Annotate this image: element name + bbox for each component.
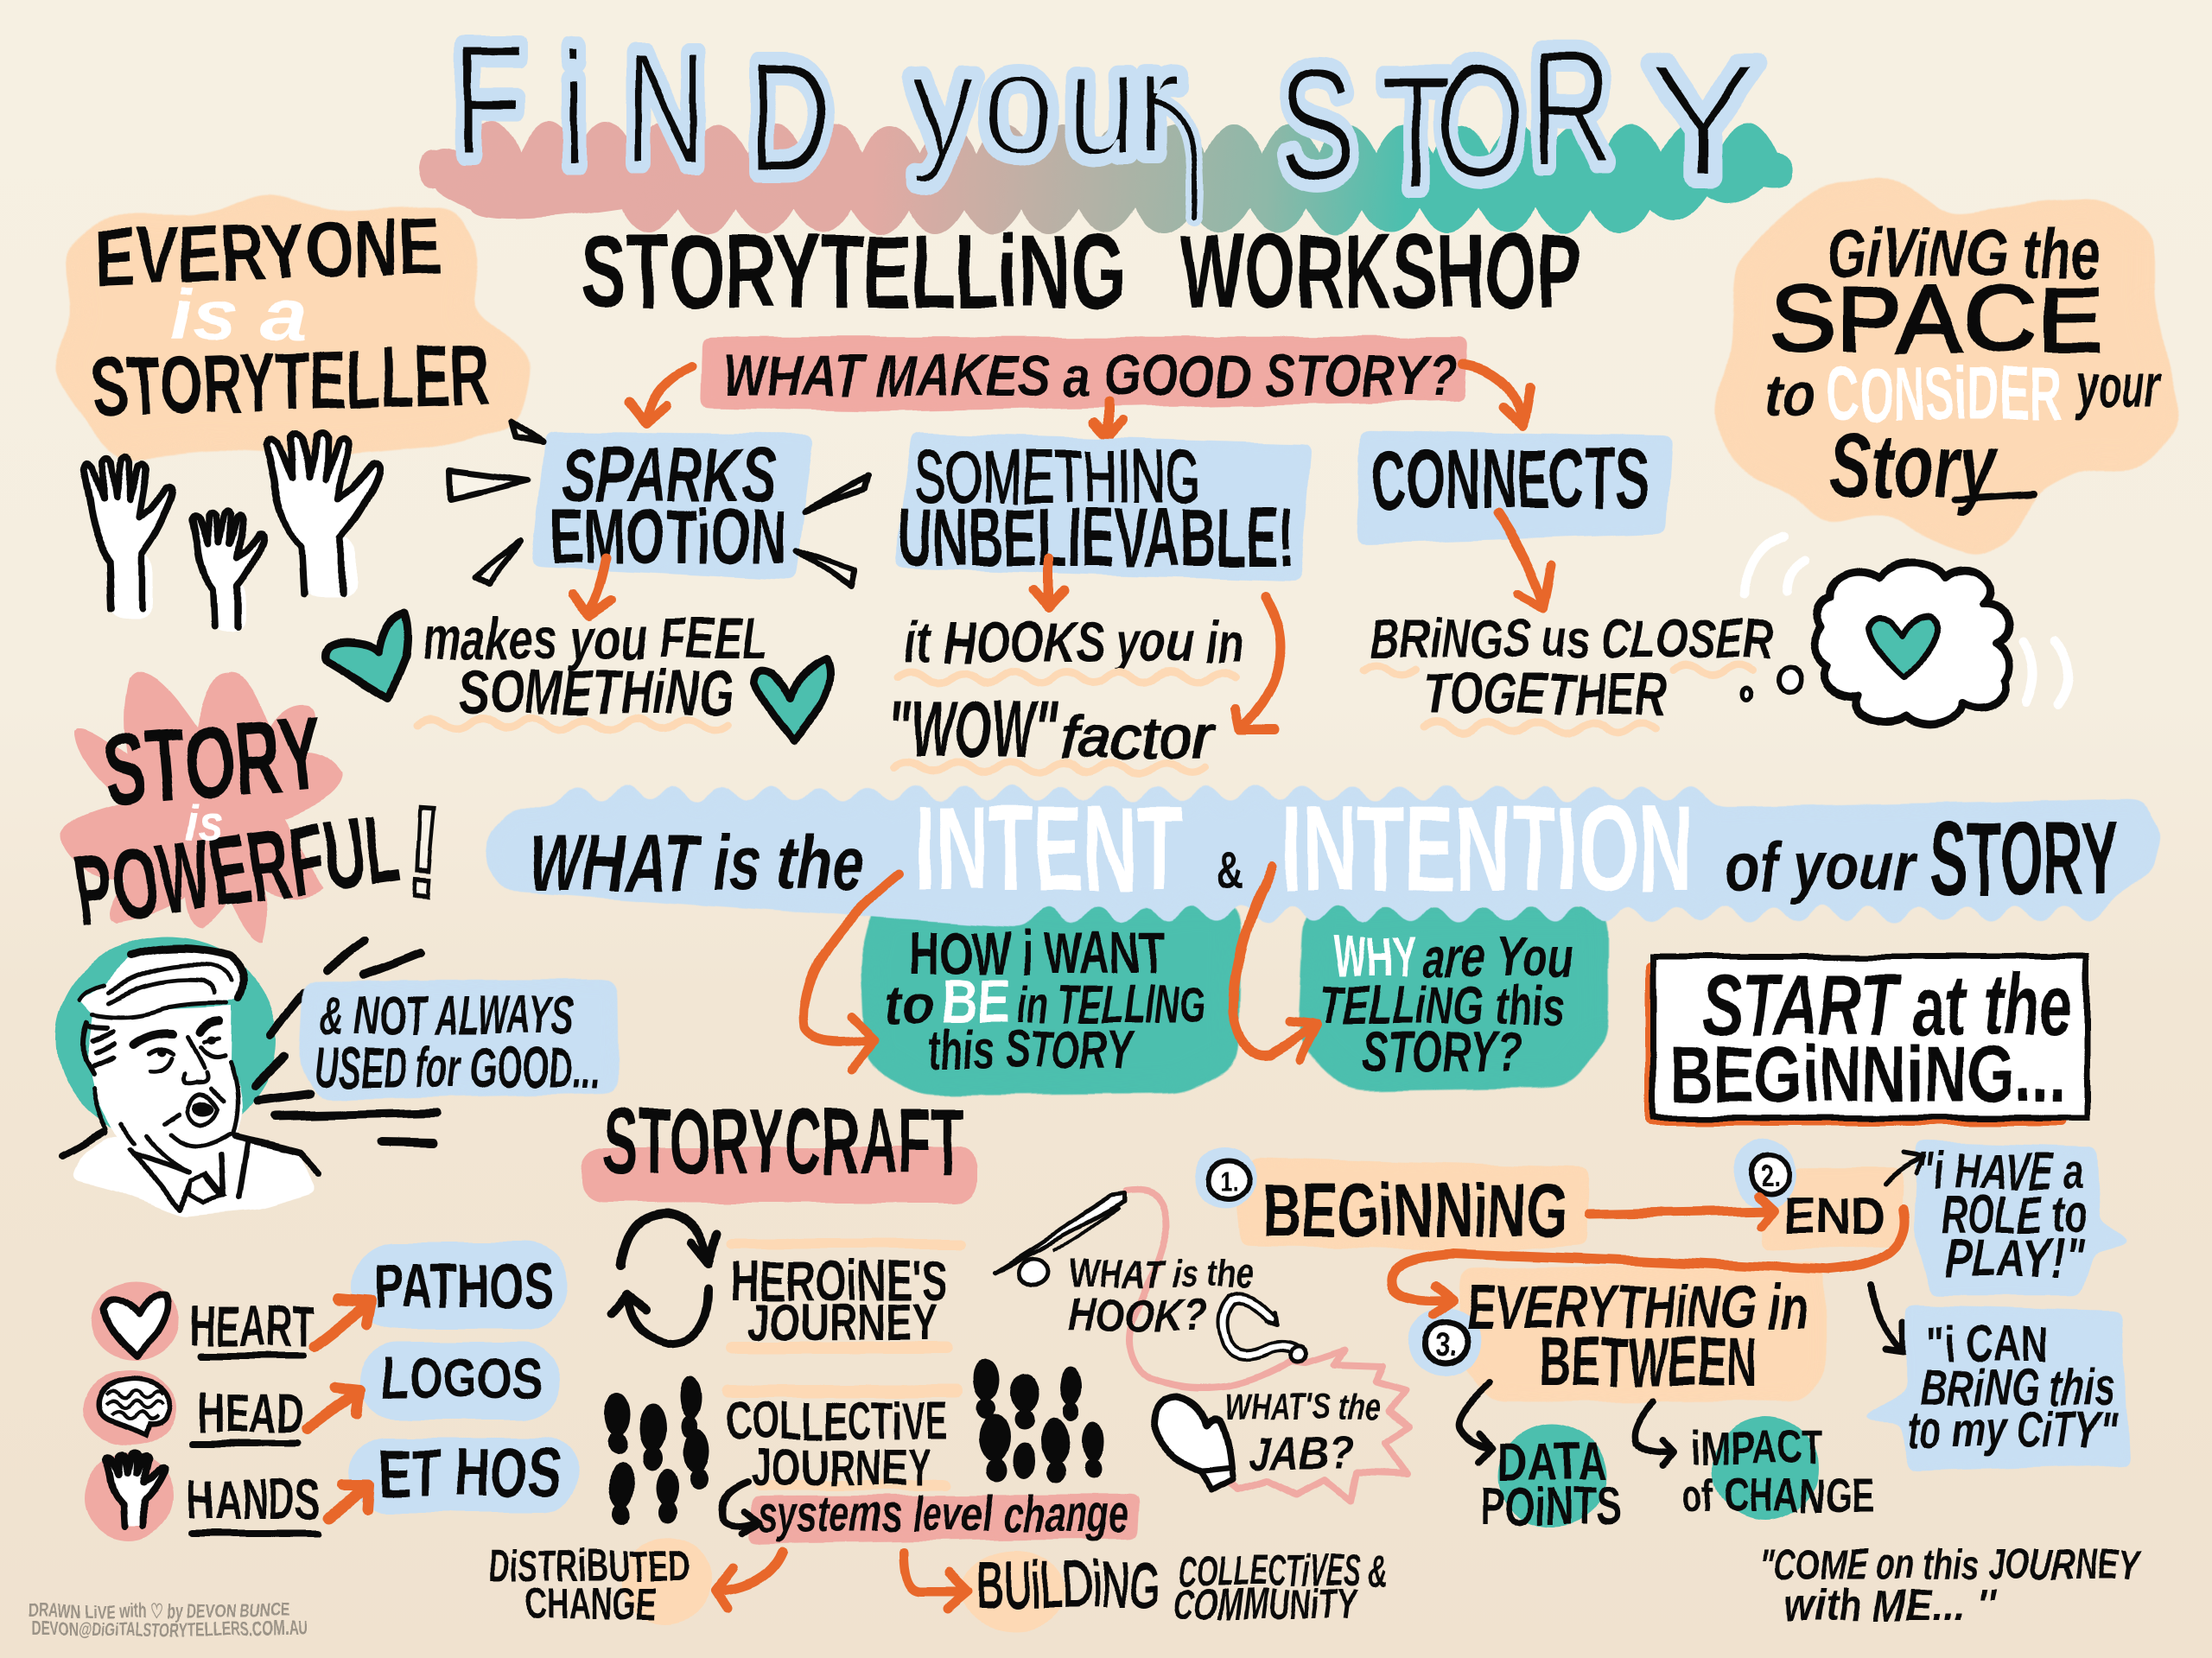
- banner shape: [486, 780, 2162, 928]
- banner text: of your: [1724, 829, 1918, 905]
- panel: story is powerful: is: [185, 795, 225, 851]
- side hair: [82, 1022, 114, 1074]
- distributed change: CHANGE: [525, 1579, 656, 1628]
- quote bubble: I have a role to play: ROLE to: [1942, 1185, 2087, 1245]
- pink hook line and jab outline: [1128, 1191, 1410, 1501]
- callout: and not always used for good: USED for GOOD...: [314, 1035, 600, 1099]
- text: why are you telling this story: are You: [1422, 926, 1573, 988]
- data points: POiNTS: [1480, 1477, 1621, 1537]
- arrows from question: [629, 365, 1529, 437]
- icon: footprints right: [973, 1359, 1103, 1483]
- blue box: something unbelievable: SOMETHING: [914, 436, 1202, 518]
- facial features: [134, 1022, 219, 1045]
- heading text: [89, 202, 491, 435]
- blue box: connects: [1357, 430, 1672, 544]
- text block: wow factor: factor: [1059, 705, 1216, 769]
- blue box: sparks emotion: SPARKS: [561, 432, 777, 518]
- heroine's journey: [727, 1239, 966, 1354]
- quote bubble: I can bring this to my city: "i CAN: [1928, 1315, 2048, 1373]
- panel: giving the space: Story: [1829, 415, 1999, 517]
- storycraft heading: [582, 1089, 977, 1203]
- panel: everyone is a storyteller: [52, 192, 534, 460]
- distributed change: [490, 1538, 783, 1628]
- text block: it hooks you in: [899, 610, 1244, 683]
- what's the jab text: [1224, 1387, 1380, 1479]
- arrow to role: [1885, 1153, 1925, 1184]
- collective journey: JOURNEY: [751, 1439, 931, 1496]
- impact of change: iMPACT: [1692, 1420, 1822, 1475]
- text: how I want to be in telling this story: to: [886, 975, 934, 1035]
- title halo: STOR: [1279, 16, 1612, 224]
- icon: circular arrows: [612, 1213, 717, 1343]
- callout: and not always used for good: [300, 980, 619, 1099]
- panel: giving the space: your: [2074, 353, 2162, 422]
- arrow beginning to end: [1589, 1196, 1773, 1225]
- teal box: why are you: [1299, 907, 1607, 1090]
- icon: portrait caricature: [56, 937, 320, 1217]
- title scalloped band: [420, 123, 1791, 232]
- heart head hands list: PATHOS: [374, 1250, 554, 1322]
- icon: thought cloud with heart: [1741, 536, 2069, 726]
- storycraft heading: STORYCRAFT: [603, 1089, 963, 1193]
- speech lines: [255, 940, 436, 1143]
- title halo: Y: [1646, 29, 1761, 213]
- title lettering: STOR: [1279, 16, 1612, 224]
- heroine's journey: HEROiNE'S: [730, 1250, 949, 1312]
- step 2: end: [1734, 1139, 1903, 1250]
- peach blob: [52, 192, 534, 460]
- impact of change: [1634, 1401, 1875, 1522]
- heart head hands list: [85, 1242, 578, 1541]
- ethos: [349, 1438, 578, 1512]
- blue box: sparks emotion: [532, 432, 814, 581]
- face: [86, 1007, 243, 1175]
- blue scalloped banner: [486, 780, 2162, 1094]
- icon: heart: [104, 1294, 168, 1356]
- panel: story is powerful: POWERFUL: [67, 791, 407, 948]
- white suit body: [71, 1136, 318, 1217]
- heart head hands list: LOGOS: [381, 1346, 543, 1410]
- panel: giving the space: to: [1765, 361, 1815, 430]
- subtitle: Storytelling Workshop: STORYTELLiNG: [579, 213, 1125, 330]
- what is the hook text: [1067, 1251, 1255, 1341]
- pink question box: [702, 337, 1467, 411]
- step 3: everything in between: 3.: [1436, 1328, 1457, 1364]
- credit: DEVON@DiGiTALSTORYTELLERS.COM.AU: [32, 1618, 307, 1640]
- text block: wow factor: "WOW": [889, 683, 1058, 774]
- quote: come on this journey with me: with ME... '': [1783, 1581, 1997, 1629]
- panel: giving the space: [1714, 180, 2181, 558]
- heading text: EVERYONE: [92, 202, 442, 302]
- blue box: connects: CONNECTS: [1371, 431, 1648, 526]
- title lettering: FiND: [454, 10, 830, 207]
- building collectives and community: COLLECTiVES &: [1177, 1547, 1389, 1595]
- collective journey: COLLECTiVE: [727, 1392, 949, 1450]
- title: Find your Story: [420, 10, 1791, 232]
- arrow to city: [1872, 1285, 1904, 1352]
- impact of change: of CHANGE: [1681, 1468, 1875, 1522]
- panel: story is powerful: [60, 671, 445, 948]
- arrows from boxes: [572, 513, 1552, 730]
- text: how I want to be in telling this story: in TELLING: [1018, 975, 1206, 1035]
- blue box: something unbelievable: UNBELIEVABLE!: [897, 492, 1295, 584]
- question text: WHAT MAKES a GOOD STORY?: [722, 343, 1457, 409]
- title lettering: [454, 10, 1761, 224]
- text block: makes you feel something: SOMETHiNG: [459, 658, 734, 727]
- icon: small hand: [106, 1453, 164, 1527]
- text block: brings us closer together: [1363, 609, 1772, 733]
- icon: footprints left: [604, 1377, 711, 1526]
- icon: hook: [1223, 1298, 1306, 1362]
- text: how I want to be in telling this story: [886, 919, 1206, 1080]
- credit: [29, 1600, 307, 1640]
- step 2: end: END: [1783, 1186, 1885, 1246]
- pathos: [353, 1242, 568, 1330]
- icon: boxing glove: [1154, 1397, 1233, 1490]
- collective journey: [723, 1385, 963, 1496]
- arrows into teal boxes: [804, 867, 1318, 1071]
- hair: [80, 950, 245, 1017]
- systems level change: systems level change: [758, 1486, 1128, 1542]
- credit: DRAWN LiVE with ♡ by DEVON BUNCE: [29, 1600, 289, 1622]
- quote bubble: I have a role to play: PLAY!": [1945, 1229, 2084, 1289]
- step 3: everything in between: BETWEEN: [1540, 1324, 1758, 1400]
- quote: come on this journey with me: [1758, 1540, 2142, 1629]
- panel: story is powerful: !: [404, 778, 445, 925]
- data points: DATA: [1497, 1432, 1607, 1492]
- icon: teal heart left: [325, 613, 408, 699]
- title halo: your: [910, 22, 1181, 186]
- arrow end to everything: [1392, 1208, 1904, 1315]
- subtitle: Storytelling Workshop: WORKSHOP: [1180, 213, 1582, 330]
- step 3: everything in between: EVERYTHiNG in: [1465, 1274, 1808, 1343]
- callout: start at the beginning: BEGiNNiNG...: [1670, 1031, 2065, 1119]
- text: how I want to be in telling this story: HOW i WANT: [910, 919, 1164, 987]
- building collectives and community: [903, 1547, 1389, 1630]
- suit lines: [63, 1132, 320, 1173]
- building collectives and community: BUiLDiNG: [977, 1549, 1160, 1621]
- text block: makes you feel something: makes you FEEL: [423, 606, 769, 671]
- banner text: &: [1217, 840, 1243, 902]
- arrows: [314, 1298, 371, 1345]
- data points: [1459, 1382, 1621, 1537]
- blue box: something unbelievable: [893, 433, 1312, 584]
- title lettering: your: [910, 22, 1181, 186]
- step 3: everything in between: [1408, 1262, 1825, 1401]
- what's the jab text: JAB?: [1249, 1427, 1354, 1479]
- panel: giving the space: SPACE: [1769, 266, 2104, 371]
- text: how I want to be in telling this story: BE: [942, 968, 1011, 1037]
- icon: teal heart right: [754, 658, 829, 741]
- heading text: STORYTELLER: [89, 328, 491, 435]
- title halo: [454, 10, 1761, 224]
- banner text: [529, 780, 2119, 917]
- step 1: beginning: 1.: [1222, 1166, 1239, 1199]
- text block: brings us closer together: BRiNGS us CLOSER: [1370, 609, 1772, 669]
- callout: and not always used for good: & NOT ALWAYS: [321, 984, 575, 1046]
- banner text: WHAT is the: [529, 821, 864, 907]
- icon: raised hands: [83, 432, 380, 632]
- labels: HEART: [190, 1293, 314, 1357]
- text block: it hooks you in: it HOOKS you in: [906, 610, 1244, 674]
- logos: [359, 1343, 561, 1420]
- step 1: beginning: [1196, 1147, 1588, 1253]
- teal box: how I want to be: [861, 903, 1241, 1094]
- icon: fishing rod: [995, 1195, 1126, 1285]
- banner text: INTENTION: [1281, 780, 1694, 916]
- title lettering: Y: [1646, 29, 1761, 213]
- pink circles: [85, 1281, 180, 1541]
- panel: giving the space: GiViNG the: [1826, 215, 2101, 291]
- heart head hands list: ET HOS: [378, 1434, 561, 1510]
- text block: makes you feel something: [416, 606, 769, 729]
- text block: brings us closer together: TOGETHER: [1423, 661, 1667, 727]
- what is the hook text: HOOK?: [1067, 1291, 1207, 1341]
- quote bubble: I can bring this to my city: BRiNG this: [1921, 1359, 2114, 1417]
- building collectives and community: COMMUNiTY: [1173, 1580, 1359, 1629]
- step 2: end: 2.: [1761, 1159, 1780, 1192]
- heart head hands list: HEAD: [198, 1381, 303, 1445]
- callout: start at the beginning: [1645, 956, 2087, 1126]
- what is the hook text: WHAT is the: [1070, 1251, 1255, 1296]
- systems level change: [721, 1482, 1140, 1543]
- quote bubble: I have a role to play: [1914, 1141, 2133, 1295]
- text: how I want to be in telling this story: this STORY: [928, 1020, 1135, 1080]
- quote bubble: I can bring this to my city: [1857, 1305, 2129, 1471]
- blue box: sparks emotion: EMOTiON: [550, 494, 786, 581]
- distributed change: DiSTRiBUTED: [490, 1541, 688, 1591]
- banner text: INTENT: [914, 780, 1182, 916]
- heart head hands list: HANDS: [187, 1467, 321, 1531]
- text: why are you telling this story: TELLiNG this: [1319, 976, 1563, 1036]
- text: why are you telling this story: STORY?: [1362, 1020, 1521, 1083]
- text: why are you telling this story: [1319, 924, 1573, 1083]
- heroine's journey: JOURNEY: [747, 1293, 938, 1351]
- heading text: is a: [169, 276, 308, 354]
- title halo: FiND: [454, 10, 830, 207]
- quote bubble: I can bring this to my city: to my CiTY": [1907, 1402, 2119, 1458]
- text: why are you telling this story: WHY: [1333, 924, 1415, 988]
- burst triangles: [450, 421, 868, 588]
- quote bubble: I have a role to play: "i HAVE a: [1917, 1142, 2083, 1200]
- panel: story is powerful: STORY: [99, 696, 327, 829]
- what's the jab text: WHAT'S the: [1224, 1387, 1380, 1427]
- step 1: beginning: BEGiNNiNG: [1262, 1167, 1568, 1253]
- icon: brain: [100, 1380, 169, 1435]
